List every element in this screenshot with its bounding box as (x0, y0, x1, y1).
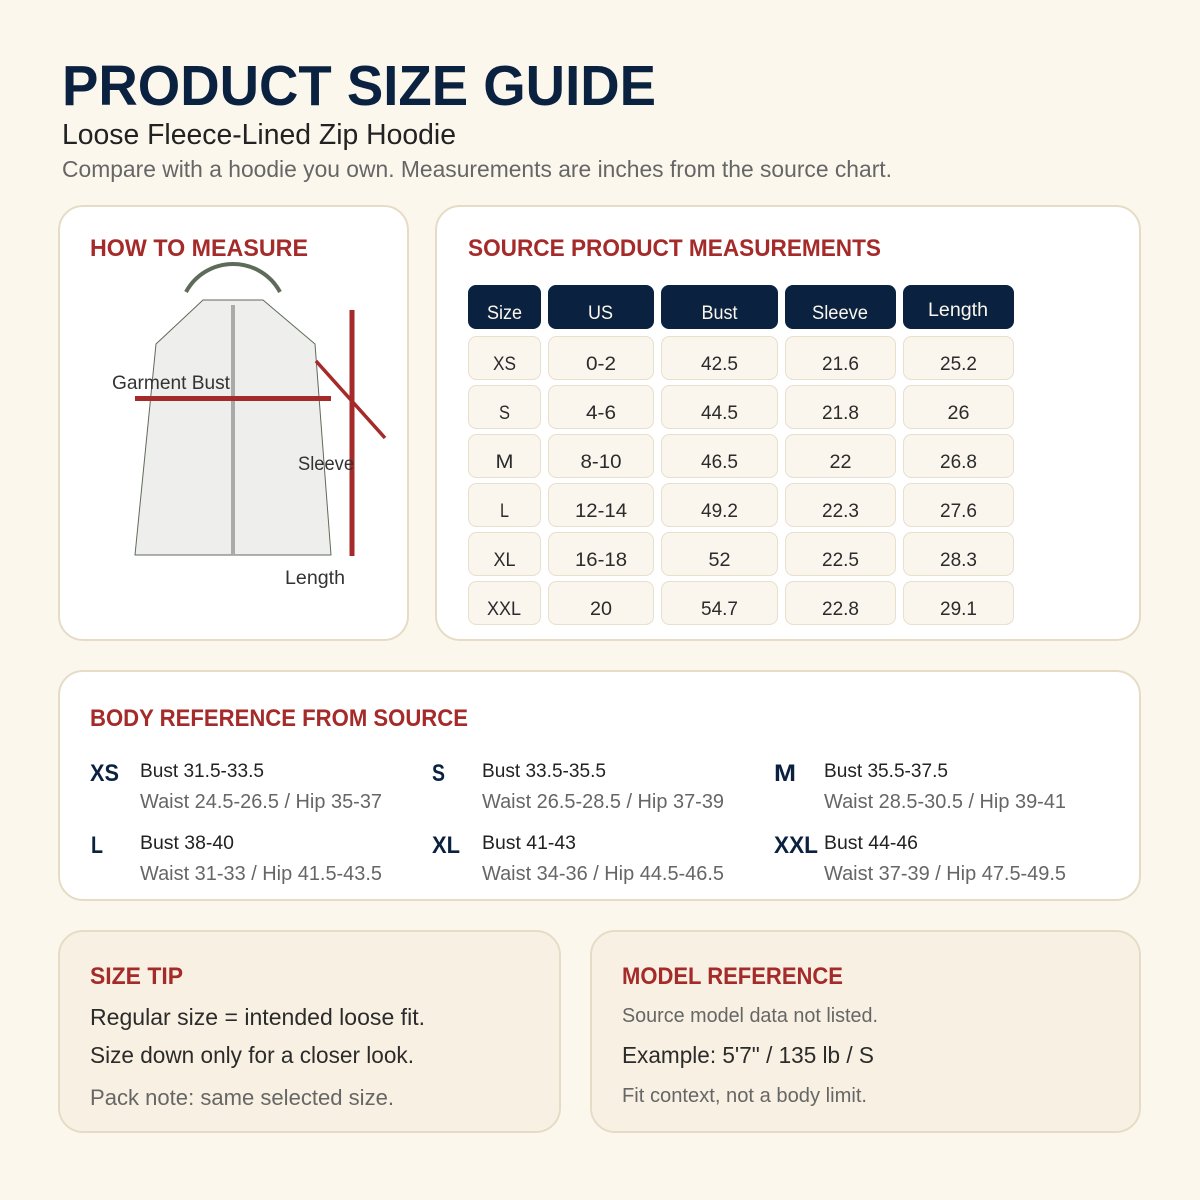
body size XXL: Bust 44-46 (824, 833, 918, 854)
row S: 4-6 (586, 402, 616, 424)
row XL: 16-18 (575, 549, 627, 571)
body size XS (90, 760, 382, 813)
row L: 12-14 (575, 500, 627, 522)
body size L: L (91, 832, 103, 859)
body size L: Waist 31-33 / Hip 41.5-43.5 (140, 863, 382, 885)
row XS: XS (493, 353, 516, 375)
row S: 44.5 (701, 402, 738, 424)
row L: 27.6 (940, 500, 977, 522)
panel: size tip (59, 931, 560, 1132)
body size XL: XL (432, 832, 460, 859)
row M: 26.8 (940, 451, 977, 473)
row XL: XL (494, 549, 516, 571)
heading: source product measurements: SOURCE PRODUCT MEASUREMENTS (468, 235, 881, 262)
row S: 26 (948, 402, 970, 424)
body size S: Bust 33.5-35.5 (482, 761, 606, 782)
body size M: M (774, 760, 796, 787)
body size XXL: XXL (774, 832, 818, 859)
hood arc (186, 264, 280, 292)
label: sleeve: Sleeve (298, 453, 354, 475)
body size XS: Bust 31.5-33.5 (140, 761, 264, 782)
sleeve measure line (316, 361, 385, 438)
table header row: Bust (702, 303, 738, 324)
body size XXL (774, 832, 1066, 885)
table header row (468, 285, 1014, 329)
row M: 8-10 (580, 451, 622, 473)
body size L (91, 832, 382, 885)
row M: 22 (830, 451, 852, 473)
body size XL: Waist 34-36 / Hip 44.5-46.5 (482, 863, 724, 885)
tagline: Compare with a hoodie you own. Measurements are inches from the source chart. (62, 156, 892, 182)
row M: M (496, 451, 514, 473)
row L: 49.2 (701, 500, 738, 522)
row S (468, 386, 1014, 428)
model note: Source model data not listed. (622, 1005, 878, 1027)
body size M: Bust 35.5-37.5 (824, 761, 948, 782)
table header row: Sleeve (812, 303, 868, 324)
body size S: Waist 26.5-28.5 / Hip 37-39 (482, 791, 724, 813)
table header row: Length (928, 300, 988, 321)
row L: L (500, 500, 509, 522)
row XL: 22.5 (822, 549, 859, 571)
body size M: Waist 28.5-30.5 / Hip 39-41 (824, 791, 1066, 813)
row XL: 52 (708, 549, 730, 571)
row XXL: 29.1 (940, 598, 977, 620)
subtitle: Loose Fleece-Lined Zip Hoodie (62, 119, 456, 151)
table header row: US (588, 303, 613, 324)
title: PRODUCT SIZE GUIDE (62, 54, 656, 118)
body size XS: Waist 24.5-26.5 / Hip 35-37 (140, 791, 382, 813)
panel: model reference (591, 931, 1140, 1132)
body size S (432, 760, 724, 813)
row XS: 42.5 (701, 353, 738, 375)
body size L: Bust 38-40 (140, 833, 234, 854)
label: length: Length (285, 567, 345, 589)
zipper (231, 305, 235, 555)
row XXL (468, 582, 1014, 624)
row XL (468, 532, 1014, 576)
fit context: Fit context, not a body limit. (622, 1085, 867, 1107)
row L (468, 484, 1014, 526)
row L: 22.3 (822, 500, 859, 522)
heading: body reference: BODY REFERENCE FROM SOURCE (90, 705, 468, 732)
model example: Example: 5'7" / 135 lb / S (622, 1042, 874, 1068)
heading: model reference: MODEL REFERENCE (622, 963, 843, 990)
row M: 46.5 (701, 451, 738, 473)
row XL: 28.3 (940, 549, 977, 571)
heading: size tip: SIZE TIP (90, 963, 183, 990)
row XS (468, 336, 1014, 380)
panel: body reference from source (59, 671, 1140, 900)
row XS: 21.6 (822, 353, 859, 375)
tip line 1: Regular size = intended loose fit. (90, 1004, 425, 1030)
row M (468, 434, 1014, 478)
body size M (774, 760, 1066, 813)
body size XS: XS (90, 760, 119, 787)
panel: source product measurements (436, 206, 1140, 640)
row S: 21.8 (822, 402, 859, 424)
row XXL: 54.7 (701, 598, 738, 620)
body size XL: Bust 41-43 (482, 833, 576, 854)
panel: how to measure (59, 206, 408, 640)
row XS: 0-2 (586, 353, 616, 375)
measurements table (468, 285, 1014, 624)
body size XXL: Waist 37-39 / Hip 47.5-49.5 (824, 863, 1066, 885)
pack note: Pack note: same selected size. (90, 1085, 394, 1110)
row S: S (499, 402, 510, 424)
heading: how to measure: HOW TO MEASURE (90, 235, 308, 262)
row XXL: 20 (590, 598, 612, 620)
body size XL (432, 832, 724, 885)
header (62, 54, 892, 182)
row XXL: 22.8 (822, 598, 859, 620)
length measure line (350, 310, 354, 556)
hoodie body (135, 300, 331, 555)
row XXL: XXL (487, 598, 521, 620)
body size S: S (432, 760, 445, 787)
table header row: Size (487, 303, 522, 324)
bust measure line (135, 396, 331, 401)
tip line 2: Size down only for a closer look. (90, 1042, 414, 1068)
row XS: 25.2 (940, 353, 977, 375)
label: garment bust: Garment Bust (112, 372, 231, 394)
hoodie measurement diagram (112, 264, 385, 589)
